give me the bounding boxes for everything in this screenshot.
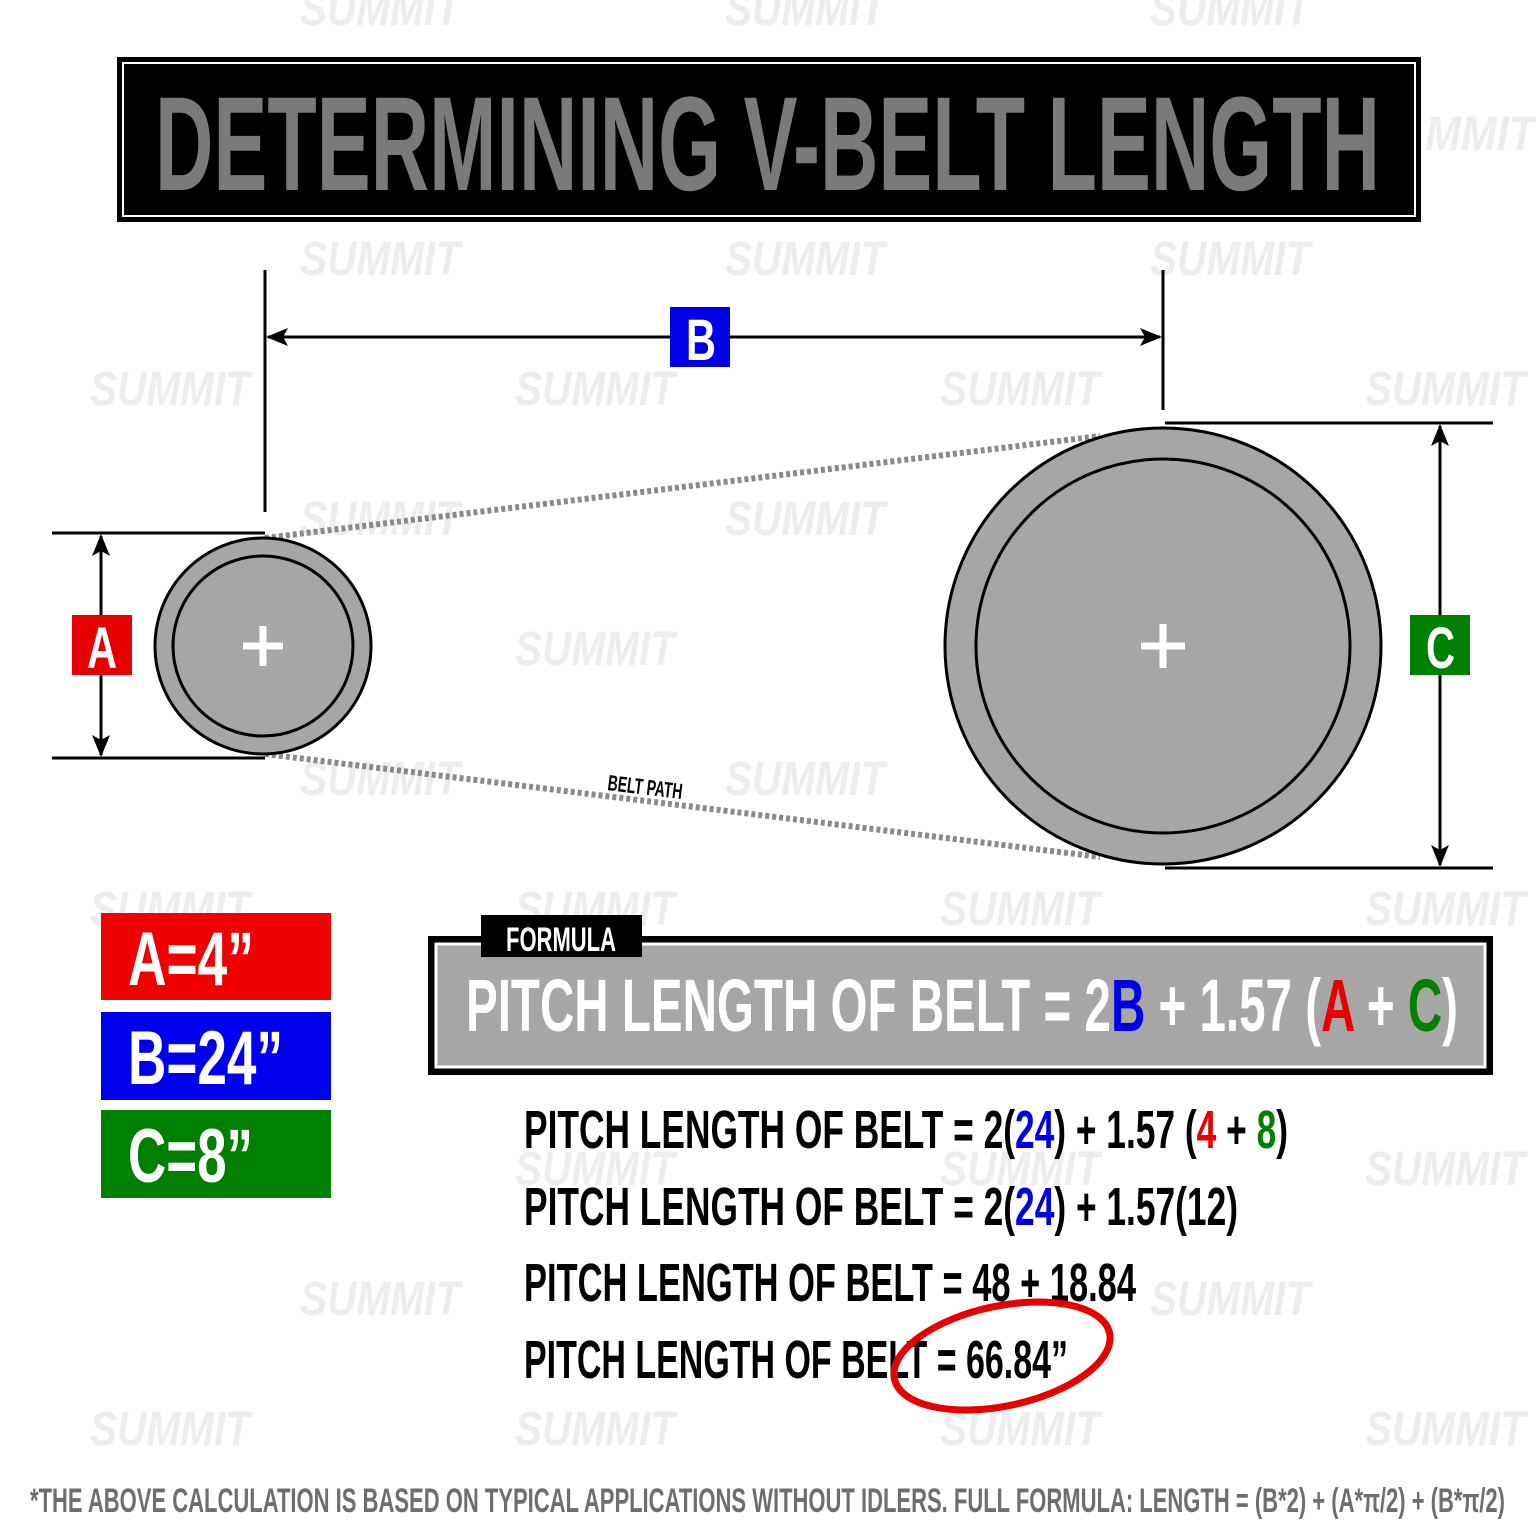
watermarks: SUMMIT	[515, 883, 678, 936]
watermarks: SUMMIT	[90, 1403, 253, 1456]
dimension B: B	[686, 308, 716, 373]
formula box: FORMULA	[506, 921, 616, 959]
dimension B	[265, 270, 1163, 512]
watermarks: SUMMIT	[1150, 1273, 1313, 1326]
watermarks: SUMMIT	[940, 883, 1103, 936]
answer highlight ellipse	[884, 1284, 1120, 1428]
calculation steps: PITCH LENGTH OF BELT = 2(24) + 1.57 (4 + 8)	[524, 1100, 1288, 1160]
dimension C	[1165, 423, 1493, 868]
legend	[101, 913, 331, 1199]
large pulley	[945, 428, 1381, 864]
watermarks: SUMMIT	[515, 1143, 678, 1196]
watermarks: SUMMIT	[515, 1403, 678, 1456]
watermarks: SUMMIT	[725, 753, 888, 806]
watermarks: SUMMIT	[300, 753, 463, 806]
small pulley	[155, 538, 371, 754]
watermarks: SUMMIT	[300, 233, 463, 286]
calculation steps: PITCH LENGTH OF BELT = 2(24) + 1.57(12)	[524, 1177, 1238, 1237]
dimension A	[52, 533, 265, 758]
dimension A: A	[87, 616, 117, 681]
dimension C: C	[1426, 616, 1455, 681]
legend: B=24”	[128, 1016, 283, 1101]
watermarks: SUMMIT	[300, 493, 463, 546]
calculation steps: PITCH LENGTH OF BELT = 48 + 18.84	[524, 1253, 1136, 1313]
watermarks: SUMMIT	[725, 233, 888, 286]
watermarks: SUMMIT	[940, 363, 1103, 416]
watermarks: SUMMIT	[515, 623, 678, 676]
watermarks: SUMMIT	[725, 493, 888, 546]
watermarks: SUMMIT	[940, 1403, 1103, 1456]
legend: C=8”	[128, 1114, 253, 1199]
formula box: PITCH LENGTH OF BELT = 2B + 1.57 (A + C)	[466, 964, 1458, 1047]
watermarks: SUMMIT	[515, 363, 678, 416]
belt path	[265, 436, 1100, 857]
belt path: BELT PATH	[606, 770, 684, 804]
watermarks: SUMMIT	[1150, 233, 1313, 286]
watermarks: SUMMIT	[90, 883, 253, 936]
formula box	[428, 915, 1493, 1075]
watermarks: SUMMIT	[300, 1273, 463, 1326]
calculation steps: PITCH LENGTH OF BELT = 66.84”	[524, 1330, 1068, 1390]
watermarks: SUMMIT	[940, 1143, 1103, 1196]
watermarks: SUMMIT	[90, 363, 253, 416]
calculation steps	[524, 1100, 1288, 1390]
legend: A=4”	[128, 917, 254, 1002]
